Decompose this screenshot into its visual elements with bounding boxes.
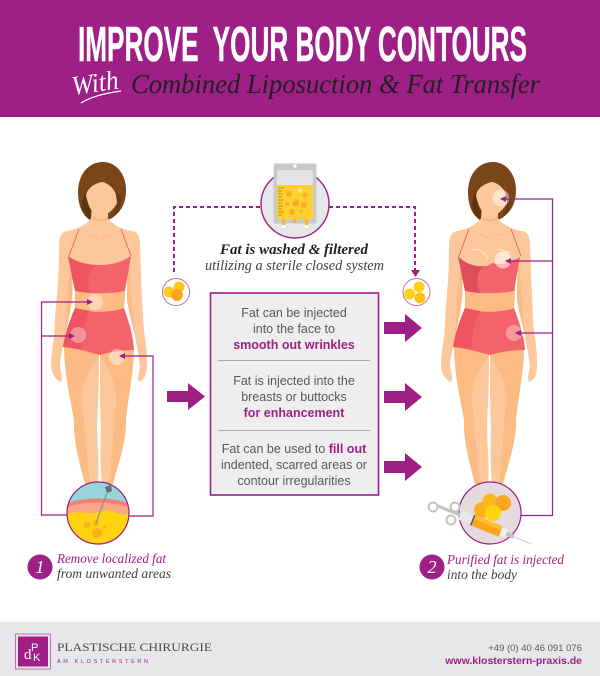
- logo mark: [16, 634, 50, 669]
- clinic subtitle: AM KLOSTERSTERN: [57, 659, 148, 665]
- panel: fat uses: [210, 293, 378, 495]
- text block: breasts: breasts or buttocks: [241, 390, 347, 404]
- text block: face: Fat can be injected: [241, 306, 347, 320]
- script word: With: With: [70, 65, 120, 101]
- injection highlight spots: [492, 190, 522, 341]
- filter caption: Fat is washed & filtered: [219, 242, 368, 258]
- dotted arrowhead: [411, 270, 420, 277]
- step 2 caption: Purified fat is injected: [446, 552, 564, 567]
- shorts: [63, 308, 134, 355]
- top garment: [458, 229, 521, 293]
- arrow: into panel: [167, 383, 205, 410]
- step 2 caption: 2: [428, 557, 436, 577]
- injection circle with fat cells: [459, 482, 521, 544]
- left figure: remove fat: [42, 162, 153, 544]
- arrow: to face: [384, 314, 422, 342]
- icon: fat cells purified: [403, 278, 430, 306]
- text block: face: smooth out wrinkles: [233, 338, 355, 352]
- step 2 caption: into the body: [447, 567, 517, 582]
- step 1 caption: Remove localized fat: [56, 551, 167, 566]
- logo mark: P: [31, 642, 38, 654]
- step 1 caption: from unwanted areas: [57, 566, 171, 581]
- text block: breasts: for enhancement: [244, 406, 345, 420]
- dotted flow connectors: [174, 207, 415, 272]
- fat highlight spots: [70, 294, 125, 365]
- icon: syringe: [428, 501, 533, 549]
- text block: breasts: Fat is injected into the: [233, 374, 355, 388]
- shorts: [453, 308, 525, 355]
- right figure: inject fat: [428, 162, 552, 549]
- step 1 caption: [28, 551, 171, 581]
- connector lines left: [42, 302, 153, 516]
- clinic name: PLASTISCHE CHIRURGIE: [57, 640, 212, 654]
- text block: contour: contour irregularities: [237, 474, 351, 488]
- connector lines right: [501, 199, 552, 516]
- website: www.klosterstern-praxis.de: [444, 655, 582, 667]
- arrow: to breast: [384, 383, 422, 411]
- text block: contour: indented, scarred areas or: [221, 458, 367, 472]
- footer band: [0, 622, 600, 676]
- arrow: to contour: [384, 453, 422, 481]
- header band: [0, 0, 600, 117]
- logo mark: K: [33, 652, 41, 664]
- icon: fat cells raw: [162, 278, 190, 306]
- magnified skin circle with cannula: [67, 482, 129, 544]
- subtitle: Combined Liposuction & Fat Transfer: [131, 69, 540, 99]
- phone: +49 (0) 40 46 091 076: [488, 643, 582, 654]
- logo mark: d: [24, 647, 32, 663]
- text block: contour: fill out: [329, 442, 367, 456]
- text block: face: into the face to: [253, 322, 335, 336]
- filter caption: [205, 242, 384, 274]
- step 2 caption: [420, 552, 564, 582]
- top garment: [68, 229, 131, 293]
- filter caption: utilizing a sterile closed system: [205, 258, 384, 274]
- icon: fat filter bag: [261, 164, 329, 238]
- text block: contour: Fat can be used to: [222, 442, 329, 456]
- step 1 caption: 1: [36, 557, 44, 577]
